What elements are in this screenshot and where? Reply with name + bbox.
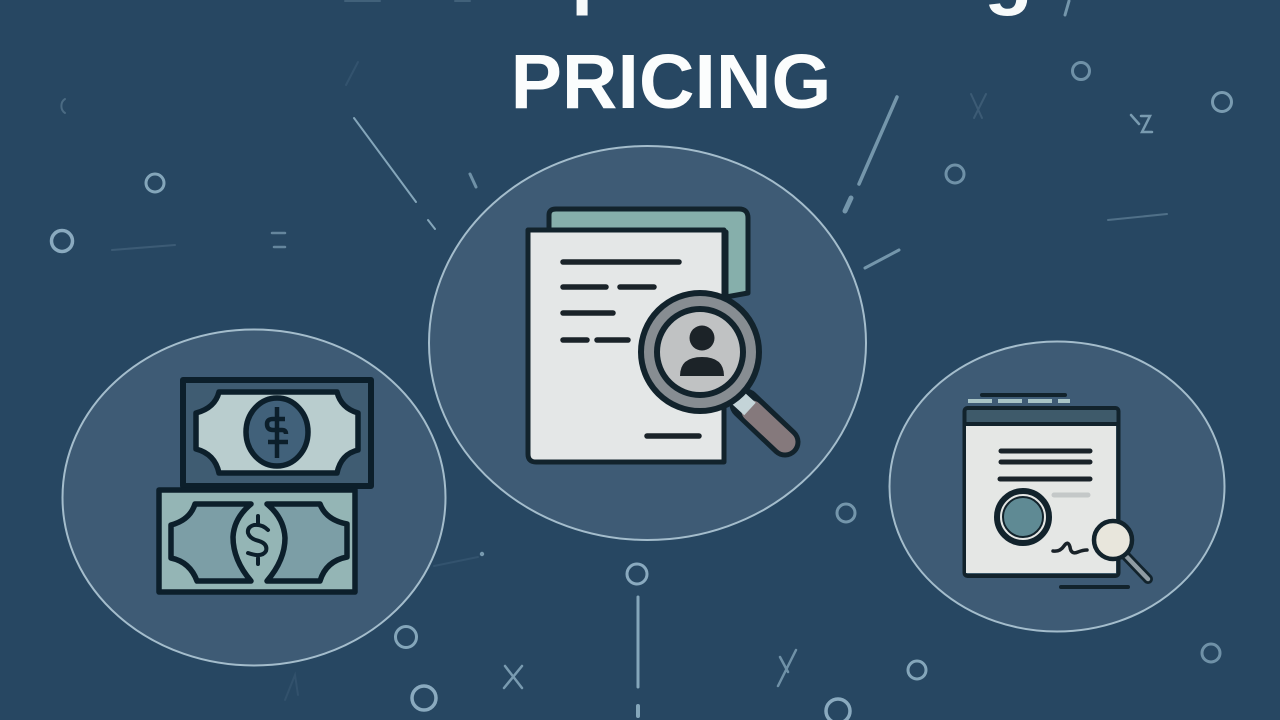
icon: front document — [528, 230, 724, 462]
heading: PRICING: PRICING — [511, 39, 831, 125]
icon: base line under certificate — [1061, 585, 1128, 589]
icon: seal — [997, 491, 1049, 543]
icon: lower banknote — [159, 490, 355, 592]
panel: right circle with certificate — [890, 342, 1224, 632]
icon: signature — [1053, 543, 1087, 553]
icon: tab above certificate — [968, 395, 1070, 401]
icon: back folder sheet — [549, 209, 748, 297]
icon: upper banknote — [183, 380, 371, 486]
title: clipped first line, descenders only — [571, 0, 1033, 16]
panel: centre circle with document and magnifier — [429, 146, 866, 540]
icon: small magnifier — [1094, 521, 1148, 579]
icon: magnifier with person — [641, 293, 785, 442]
panel: left circle with banknotes — [62, 330, 446, 666]
icon: certificate — [964, 408, 1118, 576]
